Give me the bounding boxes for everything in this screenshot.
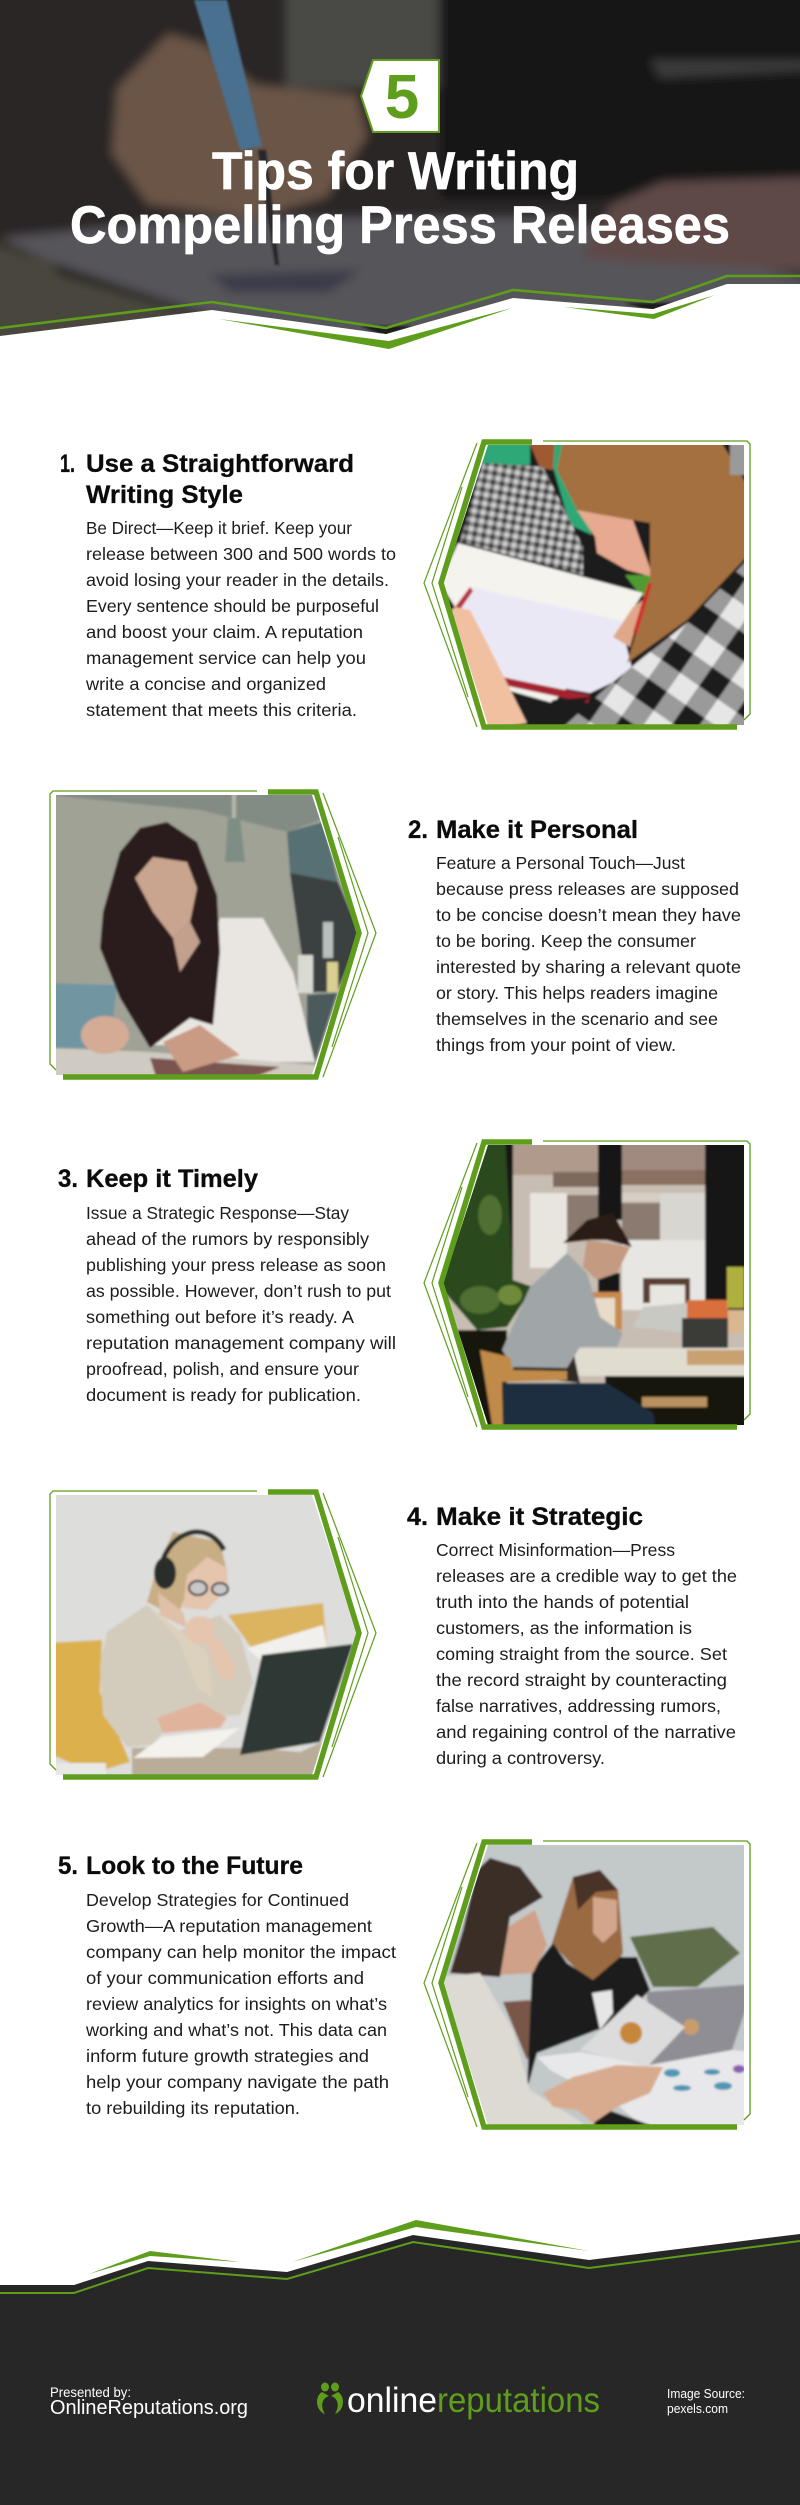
panel: tip 3 text: document is ready for publication. [86,1385,361,1405]
footer: image source: pexels.com [667,2401,728,2416]
panel: tip 5 text: review analytics for insights on what’s [86,1994,387,2014]
panel: tip 1 text: Writing Style [86,481,243,509]
panel: tip 4 text: during a controversy. [436,1748,605,1768]
panel: tip 4 text: releases are a credible way to get the [436,1566,737,1586]
photo: woman writing at table [56,795,356,1075]
panel: tip 5 text: of your communication efforts and [86,1968,364,1988]
panel: tip 1 text [60,450,396,720]
title [70,142,730,255]
panel: tip 4 text: 4. [407,1503,428,1531]
panel: tip 2 text: interested by sharing a relevant quote [436,957,741,977]
badge: number 5: 5 [385,63,419,132]
frame: tip 1 chevron border [424,441,750,727]
panel: tip 5 text: Look to the Future [86,1852,303,1880]
footer: logo [317,2381,600,2420]
icon: two people logo mark [317,2382,343,2414]
panel: tip 2 text: Feature a Personal Touch—Just [436,853,685,873]
panel: tip 1 text: avoid losing your reader in the details. [86,570,389,590]
panel: tip 1 text: Every sentence should be purposeful [86,596,379,616]
panel: tip 3 text: proofread, polish, and ensure your [86,1359,359,1379]
panel: tip 3 text: ahead of the rumors by responsibly [86,1229,369,1249]
footer: logo: online [347,2381,437,2420]
photo: woman with headphones and laptop [56,1495,356,1775]
panel: tip 5 text: help your company navigate the path [86,2072,389,2092]
title: Compelling Press Releases [70,196,730,255]
panel: tip 5 text: company can help monitor the impact [86,1942,396,1962]
panel: tip 3 text: reputation management company will [86,1333,396,1353]
panel: tip 1 text: management service can help you [86,648,366,668]
header wave: green edge and accents [0,276,800,349]
panel: tip 3 text: Issue a Strategic Response—Stay [86,1203,349,1223]
panel: tip 2 text: 2. [408,816,428,844]
panel: tip 3 text: publishing your press release as soon [86,1255,386,1275]
panel: tip 3 text: 3. [58,1165,78,1193]
panel: tip 4 text: customers, as the information is [436,1618,692,1638]
panel: tip 2 text: themselves in the scenario and see [436,1009,718,1029]
panel: tip 4 text: coming straight from the source. Set [436,1644,727,1664]
title: Tips for Writing [212,142,579,201]
panel: tip 4 text: and regaining control of the narrative [436,1722,736,1742]
frame: tip 5 chevron border [424,1841,750,2127]
panel: tip 1 text: and boost your claim. A reputation [86,622,363,642]
panel: tip 4 text: Make it Strategic [436,1503,643,1531]
panel: tip 5 text: inform future growth strategies and [86,2046,369,2066]
frame: tip 4 chevron border [50,1491,376,1777]
footer background with wave [0,2220,800,2505]
panel: tip 4 text: the record straight by counteracting [436,1670,727,1690]
footer: presented by: Presented by: [50,2384,131,2400]
panel: tip 5 text: Develop Strategies for Continued [86,1890,349,1910]
photo: student writing on paper [444,445,744,725]
footer: presented by [50,2384,248,2419]
panel: tip 1 text: write a concise and organized [85,674,326,694]
panel: tip 1 text: release between 300 and 500 words to [86,544,396,564]
panel: tip 4 text [407,1503,737,1768]
panel: tip 2 text: or story. This helps readers imagine [436,983,718,1003]
panel: tip 5 text [58,1852,396,2118]
footer: image source [667,2386,745,2416]
panel: tip 4 text: false narratives, addressing rumors, [436,1696,721,1716]
header photo: hand writing in notebook [0,0,800,360]
footer: presented by: OnlineReputations.org [50,2397,248,2419]
panel: tip 5 text: working and what’s not. This data can [85,2020,387,2040]
panel: tip 1 text: statement that meets this criteria. [86,700,357,720]
footer: logo: reputations [437,2381,600,2420]
panel: tip 3 text: as possible. However, don’t rush to put [86,1281,391,1301]
panel: tip 4 text: Correct Misinformation—Press [436,1540,675,1560]
panel: tip 2 text: Make it Personal [436,816,638,844]
photo: woman working at cafe desk [444,1145,744,1425]
panel: tip 5 text: Growth—A reputation management [86,1916,372,1936]
panel: tip 2 text: because press releases are supposed [436,879,739,899]
frame: tip 3 chevron border [424,1141,750,1427]
panel: tip 3 text: Keep it Timely [86,1165,258,1193]
panel: tip 1 text: 1. [60,450,75,478]
panel: tip 3 text [58,1165,396,1405]
panel: tip 5 text: 5. [58,1852,78,1880]
badge: number 5 [361,60,439,132]
panel: tip 3 text: something out before it’s ready. A [86,1307,354,1327]
panel: tip 1 text: Be Direct—Keep it brief. Keep your [86,518,352,538]
frame: tip 2 chevron border [50,791,376,1077]
panel: tip 2 text [408,816,741,1055]
panel: tip 1 text: Use a Straightforward [86,450,354,478]
panel: tip 2 text: things from your point of view. [436,1035,676,1055]
panel: tip 5 text: to rebuilding its reputation. [86,2098,300,2118]
panel: tip 4 text: truth into the hands of potential [436,1592,689,1612]
photo: two women reviewing charts [444,1845,744,2125]
panel: tip 2 text: to be boring. Keep the consumer [436,931,696,951]
footer: image source: Image Source: [667,2386,745,2401]
panel: tip 2 text: to be concise doesn’t mean they have [436,905,741,925]
